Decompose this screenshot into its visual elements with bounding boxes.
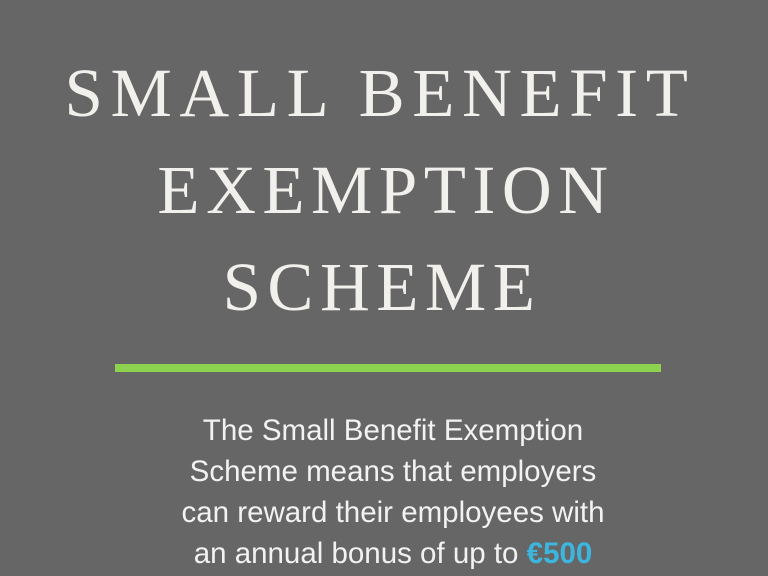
green divider line [115,364,661,372]
title: SMALL BENEFIT [64,55,696,131]
description text: Scheme means that employers [190,455,596,488]
title [64,55,696,325]
description text [181,414,605,570]
description text: an annual bonus of up to €500 [194,537,592,570]
title: EXEMPTION [157,152,615,228]
description text: can reward their employees with [181,496,605,529]
description text: The Small Benefit Exemption [203,414,583,447]
title: SCHEME [223,249,541,325]
